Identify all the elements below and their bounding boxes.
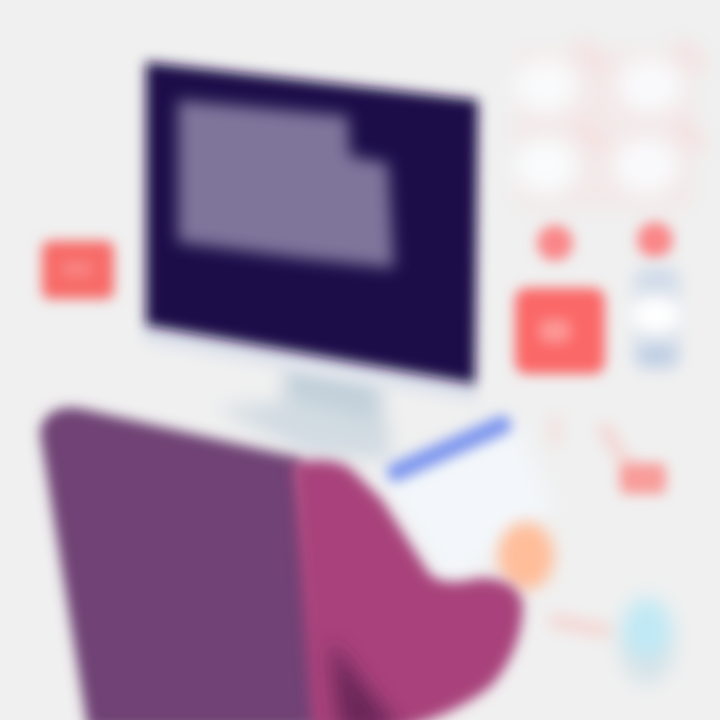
icon: small red dots bbox=[537, 222, 673, 261]
connector lines bbox=[550, 415, 632, 632]
icon: blue and white capsule bbox=[632, 266, 682, 368]
person hand bbox=[498, 522, 554, 590]
monitor bezel bbox=[143, 320, 478, 404]
icon: small pink tile bbox=[620, 463, 666, 494]
icon grid: cloud tiles bbox=[514, 42, 704, 210]
sleeve shadow fold bbox=[330, 640, 400, 720]
person back bbox=[40, 408, 335, 720]
monitor stand bbox=[215, 362, 390, 460]
monitor screen bbox=[146, 62, 478, 384]
person sleeve bbox=[292, 460, 523, 720]
paper sheet bbox=[380, 420, 552, 585]
icon: red play tile bbox=[515, 288, 605, 374]
icon: pale blue drop bbox=[619, 598, 675, 684]
icon: left red badge bbox=[42, 241, 114, 299]
blue bar on paper bbox=[396, 425, 502, 472]
screen text block bbox=[178, 100, 394, 268]
